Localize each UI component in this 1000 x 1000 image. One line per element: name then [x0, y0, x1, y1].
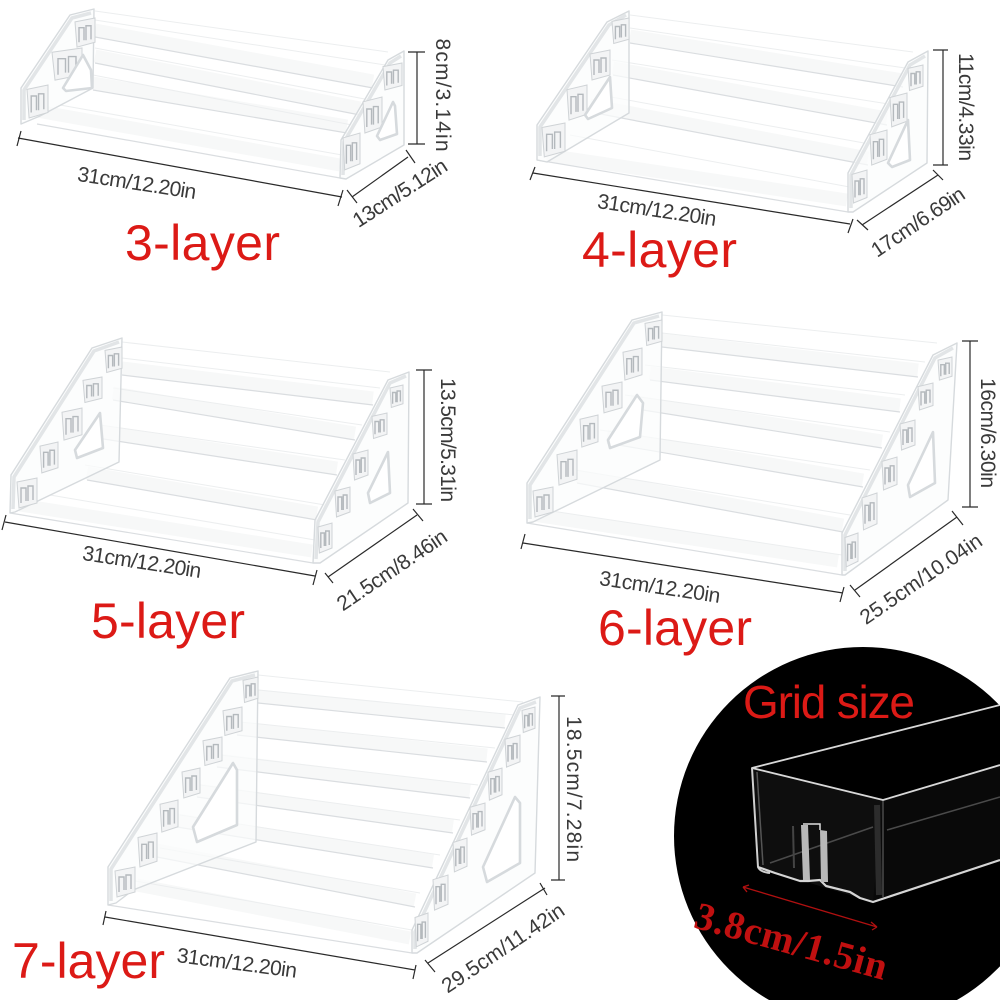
black circle background [674, 647, 1000, 1000]
rack illustration: 7-layer [108, 671, 540, 953]
width dimension: 3-layer: 31cm/12.20in [76, 163, 198, 204]
height dimension: 7-layer [551, 696, 585, 880]
panel: 6-layer rack [521, 312, 999, 656]
dimension arrow: tray width [743, 885, 877, 930]
width dimension: 6-layer [521, 534, 844, 608]
height dimension: 6-layer [962, 341, 999, 507]
width dimension: 7-layer [103, 911, 416, 983]
width dimension: 6-layer: 31cm/12.20in [598, 567, 722, 608]
height dimension: 6-layer: 16cm/6.30in [976, 378, 999, 488]
width dimension: 3-layer [17, 131, 343, 206]
height dimension: 3-layer [408, 38, 454, 152]
depth dimension: 7-layer: 29.5cm/11.42in [438, 899, 569, 998]
width dimension: 5-layer: 31cm/12.20in [81, 542, 203, 583]
heading: 3-layer: 3-layer [125, 215, 280, 271]
width dimension: 4-layer: 31cm/12.20in [596, 190, 718, 231]
rack illustration: 4-layer [537, 11, 928, 212]
panel: 4-layer rack [530, 11, 977, 278]
heading: 7-layer: 7-layer [12, 933, 165, 989]
rack illustration: 5-layer [10, 338, 409, 563]
rack illustration: 3-layer [21, 9, 404, 179]
rack illustration: 6-layer [527, 312, 957, 575]
width dimension: 4-layer [530, 167, 853, 233]
width dimension: 5-layer [2, 515, 317, 585]
heading: 6-layer: 6-layer [598, 600, 752, 656]
heading: 4-layer: 4-layer [582, 222, 737, 278]
depth dimension: 5-layer: 21.5cm/8.46in [333, 525, 452, 616]
depth dimension: 6-layer: 25.5cm/10.04in [856, 529, 987, 629]
panel: 7-layer rack [12, 671, 585, 998]
panel: 5-layer rack [2, 338, 459, 649]
depth dimension: 3-layer: 13cm/5.12in [349, 154, 452, 232]
height dimension: 4-layer: 11cm/4.33in [954, 53, 977, 161]
depth dimension: 4-layer: 17cm/6.69in [867, 183, 969, 262]
photo: clear acrylic tray [752, 705, 1000, 902]
panel: 3-layer rack [17, 9, 454, 271]
width dimension: 7-layer: 31cm/12.20in [175, 944, 298, 983]
height dimension: 5-layer [416, 370, 459, 504]
height dimension: 7-layer: 18.5cm/7.28in [562, 716, 585, 862]
heading: 5-layer: 5-layer [91, 593, 245, 649]
label: tray width: 3.8cm/1.5in [690, 894, 893, 989]
height dimension: 3-layer: 8cm/3.14in [431, 38, 454, 152]
panel: grid size detail circle [674, 647, 1000, 1000]
height dimension: 4-layer [933, 50, 977, 165]
heading: grid size: Grid size [743, 676, 915, 728]
height dimension: 5-layer: 13.5cm/5.31in [436, 378, 459, 502]
